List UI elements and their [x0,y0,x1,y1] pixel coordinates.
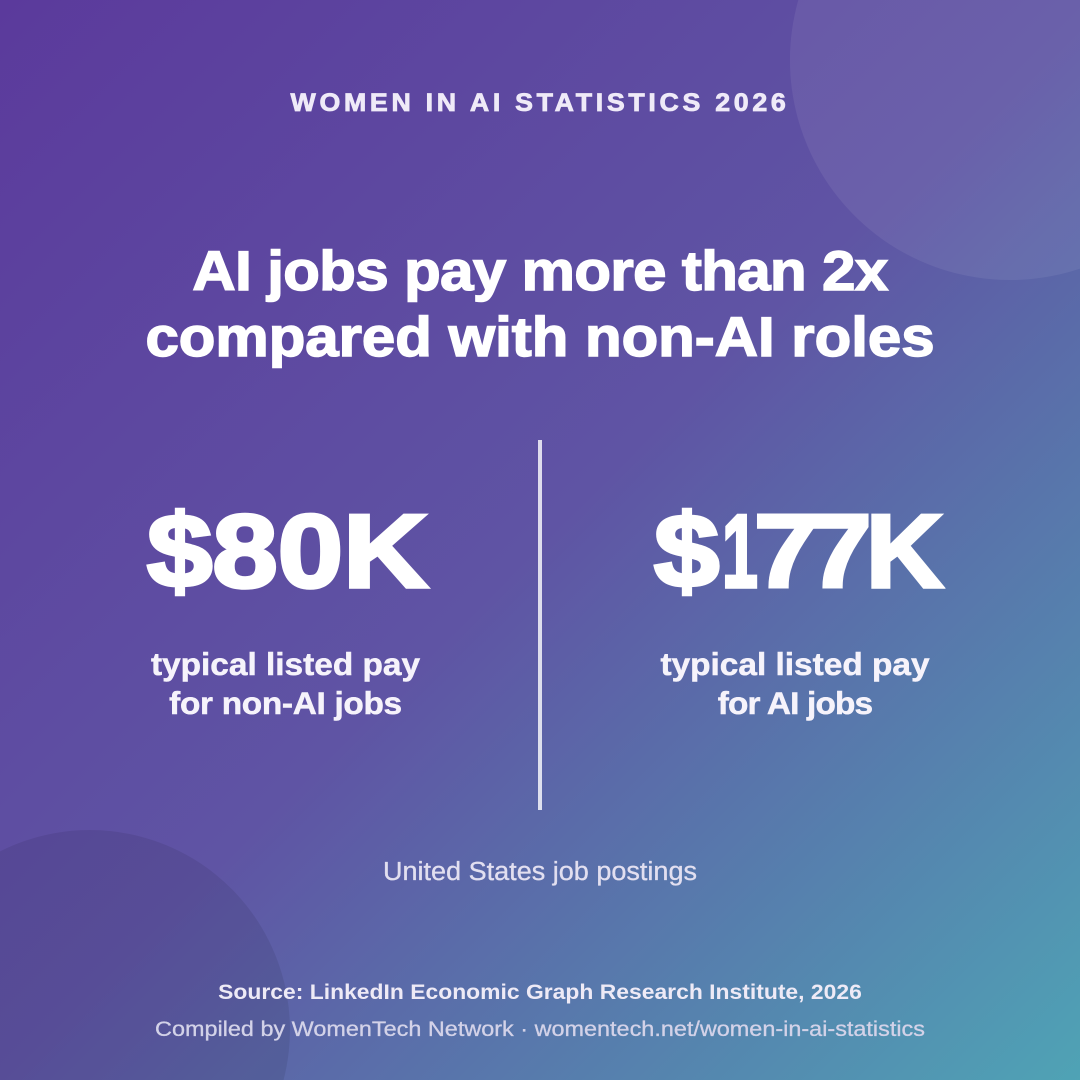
value: $80K: $80K [147,494,428,610]
main heading: AI jobs pay more than 2x [192,239,888,302]
main heading [145,239,935,368]
vertical divider [538,440,542,810]
value: $177K [653,494,946,610]
compiled-by credit: Compiled by WomenTech Network · womentech.net/women-in-ai-statistics [155,1018,925,1041]
value: $177K: 1 [722,494,758,610]
label: non-AI jobs: for non-AI jobs [169,685,401,721]
geography note: United States job postings [383,858,697,886]
label: AI jobs: typical listed pay [660,646,930,682]
value: $177K: K [866,494,943,610]
label: non-AI jobs: typical listed pay [150,646,420,682]
label: non-AI jobs [150,646,420,721]
value: $177K: $ [654,494,719,610]
value: $177K: 7 [808,494,872,610]
stat: AI pay [653,494,946,721]
value: $177K: 7 [754,494,818,610]
eyebrow title: WOMEN IN AI STATISTICS 2026 [291,89,789,117]
source line: Source: LinkedIn Economic Graph Research Institute, 2026 [218,981,862,1004]
label: AI jobs: for AI jobs [718,685,872,721]
main heading: compared with non-AI roles [145,305,935,368]
label: AI jobs [660,646,930,721]
stat: non-AI pay [146,494,431,721]
